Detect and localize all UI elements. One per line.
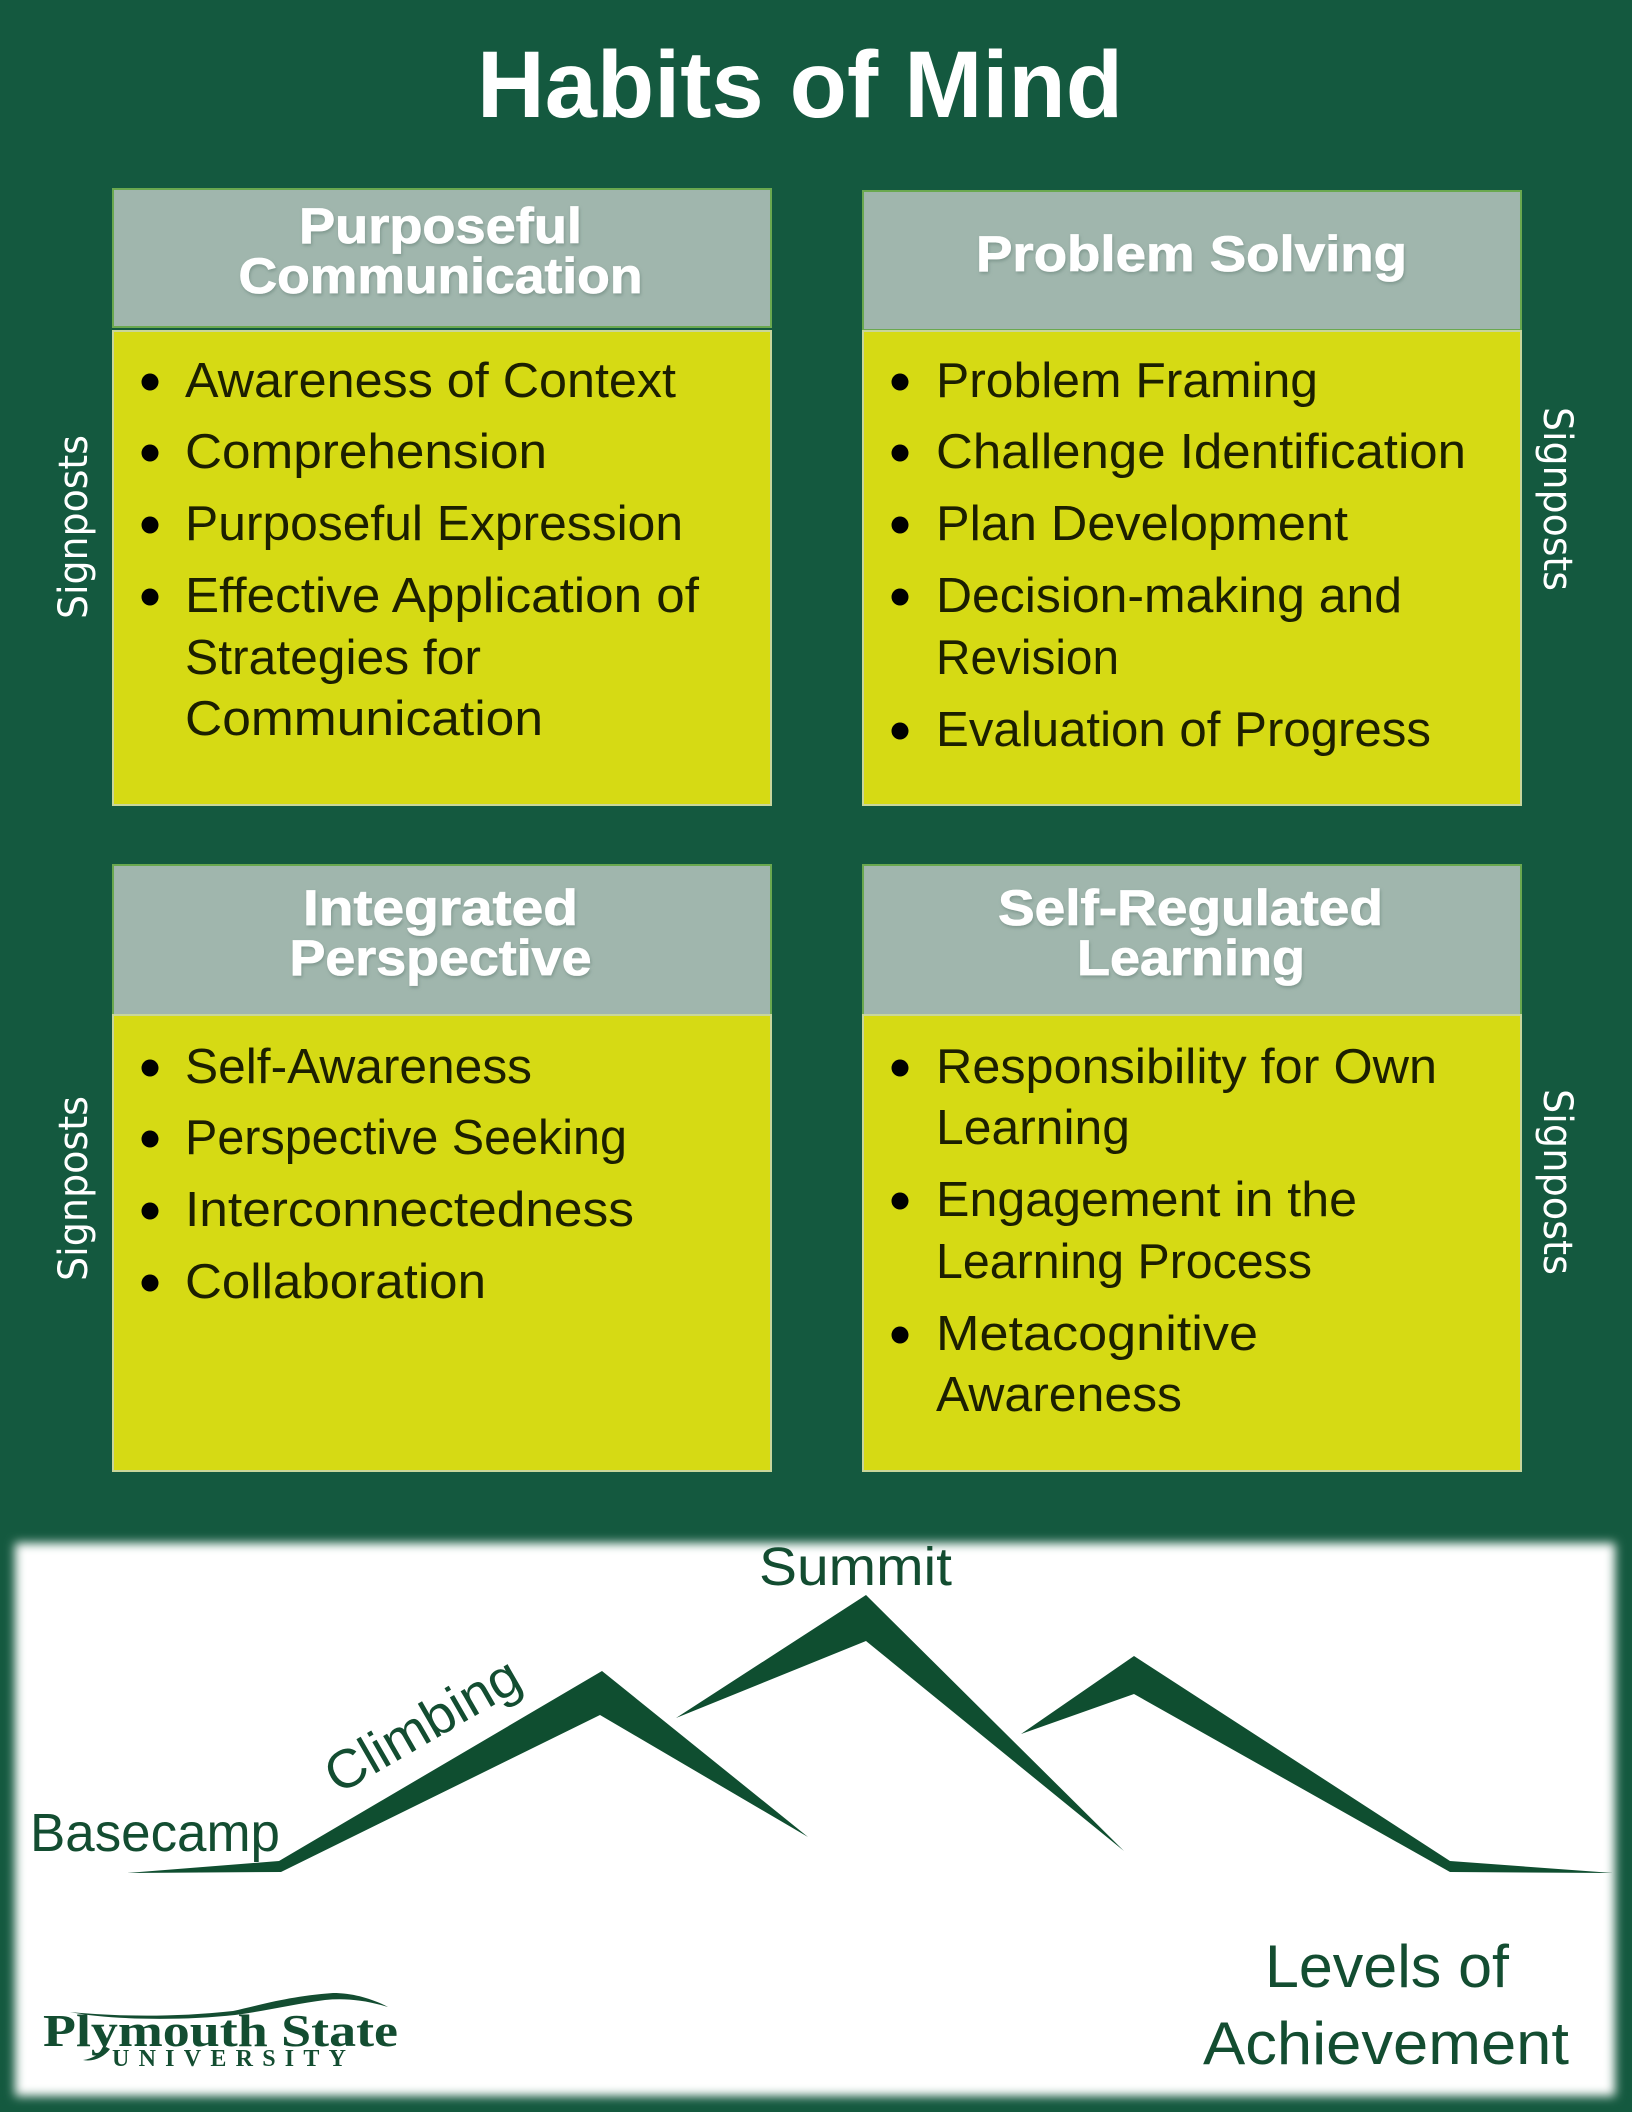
label: levels of achievement: Levels of	[1265, 1933, 1509, 2000]
signpost list: purposeful communication: Purposeful Expression	[185, 497, 683, 551]
mountain 1	[127, 1671, 808, 1873]
header: purposeful communication: Communication	[238, 248, 642, 304]
panel: levels of achievement	[15, 1543, 1615, 2096]
signpost list: problem solving: Problem Framing	[936, 354, 1318, 408]
mountain 3	[1021, 1656, 1613, 1873]
header: problem solving	[863, 191, 1521, 330]
header: integrated perspective: Integrated	[303, 880, 578, 936]
signpost list: self-regulated learning: Engagement in the	[936, 1173, 1357, 1227]
header: self-regulated learning: Self-Regulated	[998, 880, 1383, 936]
signpost list: problem solving	[863, 331, 1521, 805]
mountain 2	[676, 1595, 1124, 1851]
logo: plymouth state university: Plymouth State	[43, 2005, 398, 2056]
signpost list: self-regulated learning: Learning Process	[936, 1235, 1312, 1289]
signpost list: problem solving: Revision	[936, 631, 1119, 685]
panel: problem solving	[863, 191, 1521, 805]
signpost list: self-regulated learning: Metacognitive	[936, 1307, 1258, 1361]
side label: signposts bottom left: Signposts	[51, 1096, 97, 1281]
header: self-regulated learning: Learning	[1077, 930, 1305, 986]
label: basecamp: Basecamp	[30, 1803, 280, 1863]
signpost list: purposeful communication: Communication	[185, 692, 543, 746]
signpost list: integrated perspective: Collaboration	[185, 1255, 486, 1309]
signpost list: integrated perspective	[113, 1015, 771, 1471]
signpost list: problem solving: Challenge Identification	[936, 425, 1466, 479]
signpost list: problem solving: Decision-making and	[936, 569, 1402, 623]
signpost list: problem solving: Plan Development	[936, 497, 1348, 551]
side label: signposts bottom right: Signposts	[1534, 1089, 1580, 1275]
signpost list: purposeful communication: Awareness of Context	[185, 354, 676, 408]
signpost list: purposeful communication: Effective Application of	[185, 569, 699, 623]
signpost list: purposeful communication: Strategies for	[185, 631, 481, 685]
signpost list: purposeful communication	[113, 331, 771, 805]
side label: signposts top left: Signposts	[51, 435, 97, 619]
logo: plymouth state university	[43, 1993, 398, 2072]
label: climbing: Climbing	[314, 1645, 531, 1805]
signpost list: integrated perspective: Perspective Seeking	[185, 1111, 627, 1165]
label: levels of achievement	[1203, 1933, 1569, 2077]
panel: purposeful communication	[113, 189, 771, 805]
signpost list: purposeful communication: Comprehension	[185, 425, 547, 479]
signpost list: integrated perspective: Self-Awareness	[185, 1040, 532, 1094]
signpost list: problem solving: Evaluation of Progress	[936, 703, 1431, 757]
header: integrated perspective	[113, 865, 771, 1015]
header: problem solving: Problem Solving	[976, 226, 1407, 282]
panel: integrated perspective	[113, 865, 771, 1471]
header: self-regulated learning	[863, 865, 1521, 1015]
header: purposeful communication	[113, 189, 771, 327]
signpost list: self-regulated learning: Awareness	[936, 1368, 1182, 1422]
signpost list: self-regulated learning: Learning	[936, 1101, 1130, 1155]
signpost list: self-regulated learning	[863, 1015, 1521, 1471]
header: integrated perspective: Perspective	[290, 930, 592, 986]
panel: self-regulated learning	[863, 865, 1521, 1471]
mountain range chart	[127, 1595, 1613, 1873]
signpost list: integrated perspective: Interconnectedness	[185, 1183, 634, 1237]
signpost list: self-regulated learning: Responsibility for Own	[936, 1040, 1437, 1094]
label: levels of achievement: Achievement	[1203, 2010, 1569, 2077]
header: purposeful communication: Purposeful	[299, 198, 582, 254]
logo: plymouth state university: UNIVERSITY	[112, 2046, 346, 2072]
side label: signposts top right: Signposts	[1534, 407, 1580, 591]
label: summit: Summit	[759, 1537, 952, 1597]
title: Habits of Mind	[477, 32, 1123, 138]
